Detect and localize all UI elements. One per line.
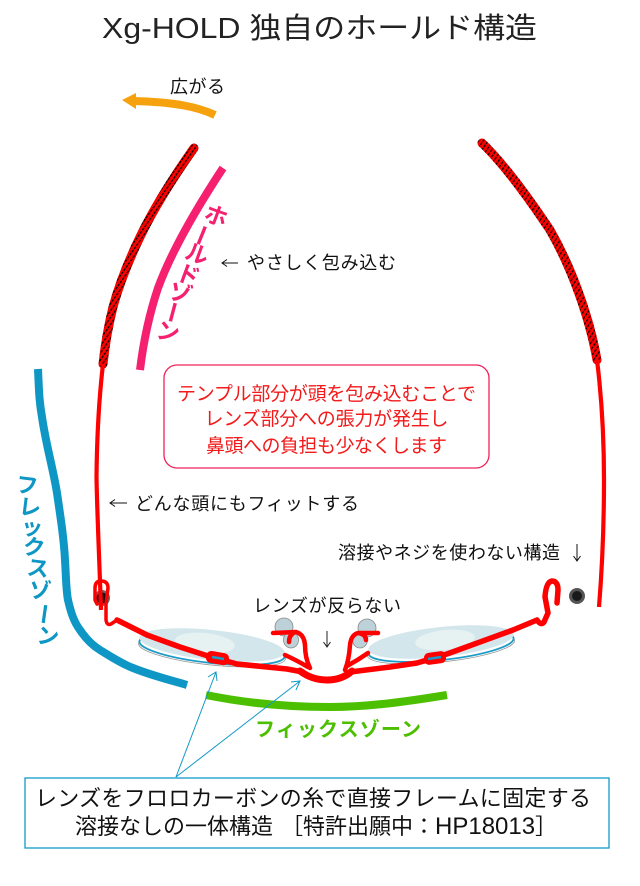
hold zone label: ド (173, 259, 203, 291)
right nose pad (352, 619, 376, 648)
callout: construction note: レンズをフロロカーボンの糸で直接フレームに固定する (35, 786, 591, 811)
flex zone label: ゾ (27, 577, 52, 604)
hold zone label (154, 200, 231, 347)
right lens clamp (423, 651, 447, 665)
callout: construction note: 溶接なしの一体構造 (75, 814, 273, 839)
left screw (94, 590, 110, 606)
title: Xg-HOLD 独自のホールド構造 (102, 12, 537, 45)
arrow: fit pointer (110, 500, 127, 506)
hold zone label: ン (154, 317, 182, 347)
flex zone label: レ (17, 494, 42, 521)
arrows: to clamp points (176, 672, 300, 777)
label: lens does not warp: レンズが反らない (253, 596, 401, 616)
callout: temple explanation (164, 365, 489, 468)
flex zone label: ー (30, 601, 57, 627)
left bridge arm (273, 632, 310, 668)
label: fits any head: どんな頭にもフィットする (135, 494, 359, 514)
main front bar (117, 581, 558, 672)
callout: temple explanation: 鼻頭への負担も少なくします (206, 435, 447, 457)
hold zone label: ー (156, 298, 188, 326)
hold zone label: ホ (201, 200, 231, 232)
left temple tip (103, 148, 194, 364)
right screw (569, 588, 585, 604)
hold zone curve (140, 168, 223, 370)
callout: temple explanation: テンプル部分が頭を包み込むことで (177, 383, 476, 405)
flex zone label: ス (25, 555, 50, 582)
label: widening: 広がる (170, 77, 225, 97)
left temple wire (96, 364, 103, 610)
bridge center (300, 671, 352, 680)
arrow: down to bridge (324, 631, 330, 647)
flex zone label: ッ (19, 514, 44, 541)
flex zone label: フ (14, 472, 39, 499)
label: gently wraps: やさしく包み込む (247, 253, 396, 273)
hold zone label: ゾ (165, 277, 195, 309)
arrow: orange widening arrow (122, 93, 215, 115)
callout: construction note (25, 778, 609, 848)
label: no welding or screws: 溶接やネジを使わない構造 (338, 543, 560, 563)
right bridge arm (345, 633, 378, 670)
left nose pad (275, 618, 298, 648)
fix zone curve (206, 695, 447, 707)
hold zone label: ル (182, 238, 212, 270)
frame front (95, 581, 558, 680)
left hinge loop (95, 581, 117, 624)
left lens (137, 622, 287, 673)
flex zone label: ン (35, 623, 60, 650)
right lens (366, 619, 516, 670)
hold zone label: ー (185, 219, 217, 251)
right temple wire (597, 360, 604, 607)
flex zone curve (38, 369, 187, 685)
callout: construction note: ［特許出願中：HP18013］ (281, 813, 557, 840)
right temple tip (482, 143, 597, 360)
left lens clamp (205, 650, 230, 666)
callout: temple explanation: レンズ部分への張力が発生し (204, 408, 448, 430)
flex zone label: ク (21, 534, 46, 561)
arrow: hold zone pointer (222, 260, 238, 266)
fix zone label: フィックスゾーン (255, 718, 421, 741)
arrow: hinge pointer (574, 544, 580, 561)
flex zone label (14, 472, 60, 650)
